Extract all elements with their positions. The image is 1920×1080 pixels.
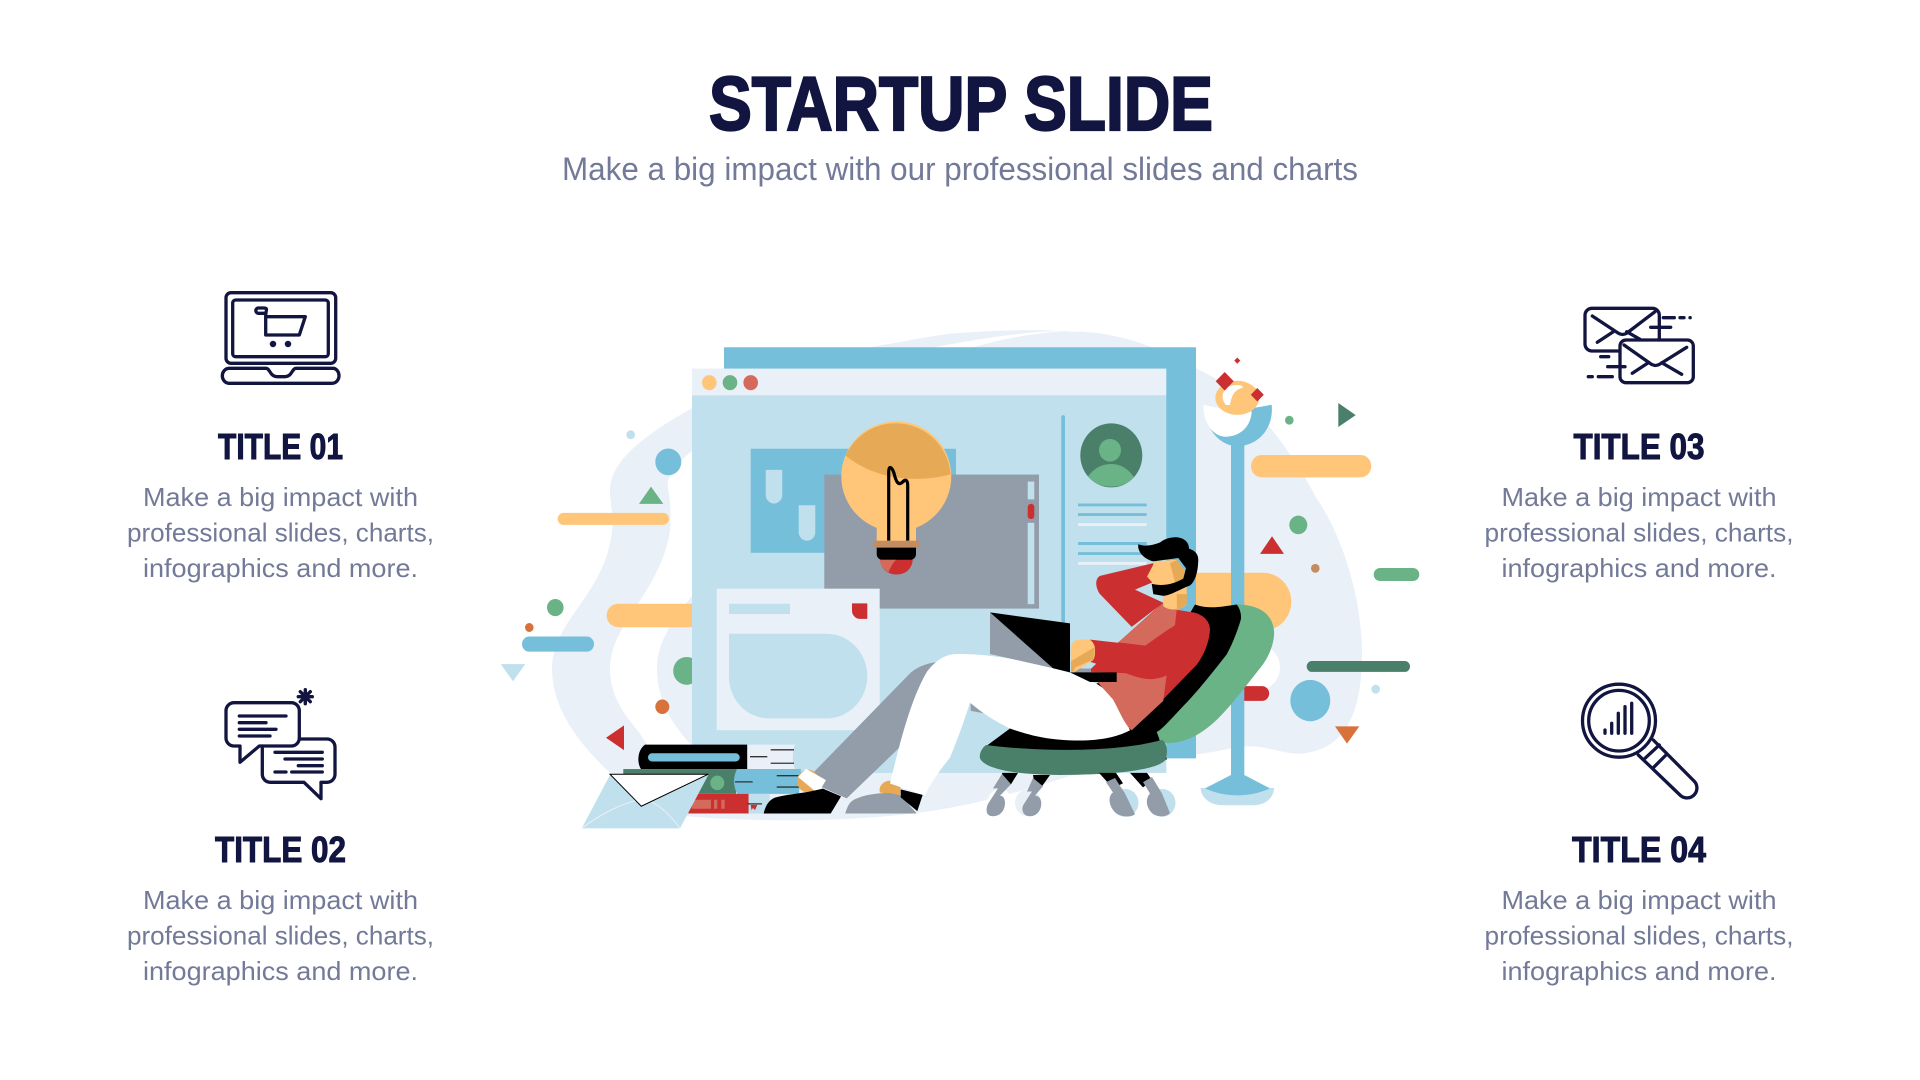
- icon: magnifying glass with bars: [1582, 684, 1697, 798]
- envelope: [582, 774, 708, 828]
- profile sidebar: [1061, 415, 1147, 623]
- back browser window: [724, 347, 1196, 758]
- book stack: [623, 745, 801, 813]
- heading: title 03: TITLE 03: [1574, 426, 1704, 467]
- grey leg and shoe: [764, 662, 947, 813]
- text block: title 02 description: Make a big impact with: [143, 885, 418, 915]
- text block: title 03 description: Make a big impact with: [1502, 482, 1776, 512]
- text block: title 03 description: infographics and more.: [1502, 553, 1776, 583]
- text block: title 04 description: infographics and more.: [1502, 956, 1776, 986]
- light bulb: [841, 421, 951, 574]
- lamp: [1201, 358, 1274, 805]
- text block: title 01 description: infographics and more.: [143, 553, 418, 583]
- front browser window: [692, 369, 1166, 773]
- heading: title 02: TITLE 02: [215, 829, 346, 870]
- chair: [980, 604, 1274, 775]
- text block: title 04 description: [1484, 885, 1794, 986]
- white content card: [717, 589, 880, 730]
- man: laptop: [990, 612, 1117, 682]
- man: forearm and hand: [1071, 628, 1190, 679]
- orange pill behind lamp: [1251, 455, 1371, 477]
- text block: title 01 description: [127, 482, 434, 583]
- chair legs: [987, 773, 1176, 817]
- heading: title 01: TITLE 01: [218, 426, 343, 467]
- floating shapes left: [501, 430, 700, 750]
- text block: title 02 description: [127, 885, 434, 986]
- title: STARTUP SLIDE: [709, 62, 1213, 147]
- floating shapes right: [1160, 403, 1419, 744]
- subtitle: Make a big impact with our professional slides and charts: [562, 151, 1358, 187]
- icon: chat bubbles: [226, 690, 335, 799]
- text block: title 01 description: professional slides, charts,: [127, 518, 434, 548]
- grey panel with slider: [824, 475, 1039, 609]
- text block: title 04 description: professional slides, charts,: [1484, 920, 1794, 950]
- background blob: [552, 330, 1362, 820]
- man: torso and raised arm: [1088, 563, 1210, 730]
- icon: laptop with shopping cart: [222, 293, 339, 383]
- man: head and beard: [1138, 537, 1198, 611]
- text block: title 01 description: Make a big impact with: [143, 482, 418, 512]
- heading: title 04: TITLE 04: [1572, 829, 1706, 870]
- man: trousers and second shoe: [845, 654, 1130, 813]
- blue image card: [751, 449, 956, 553]
- text block: title 04 description: Make a big impact with: [1502, 885, 1776, 915]
- text block: title 02 description: infographics and more.: [143, 956, 418, 986]
- central illustration: startup founder with laptop: [501, 330, 1419, 828]
- icon: envelopes: [1585, 308, 1693, 383]
- text block: title 02 description: professional slides, charts,: [127, 920, 434, 950]
- text block: title 03 description: [1484, 482, 1794, 583]
- text block: title 03 description: professional slides, charts,: [1484, 518, 1794, 548]
